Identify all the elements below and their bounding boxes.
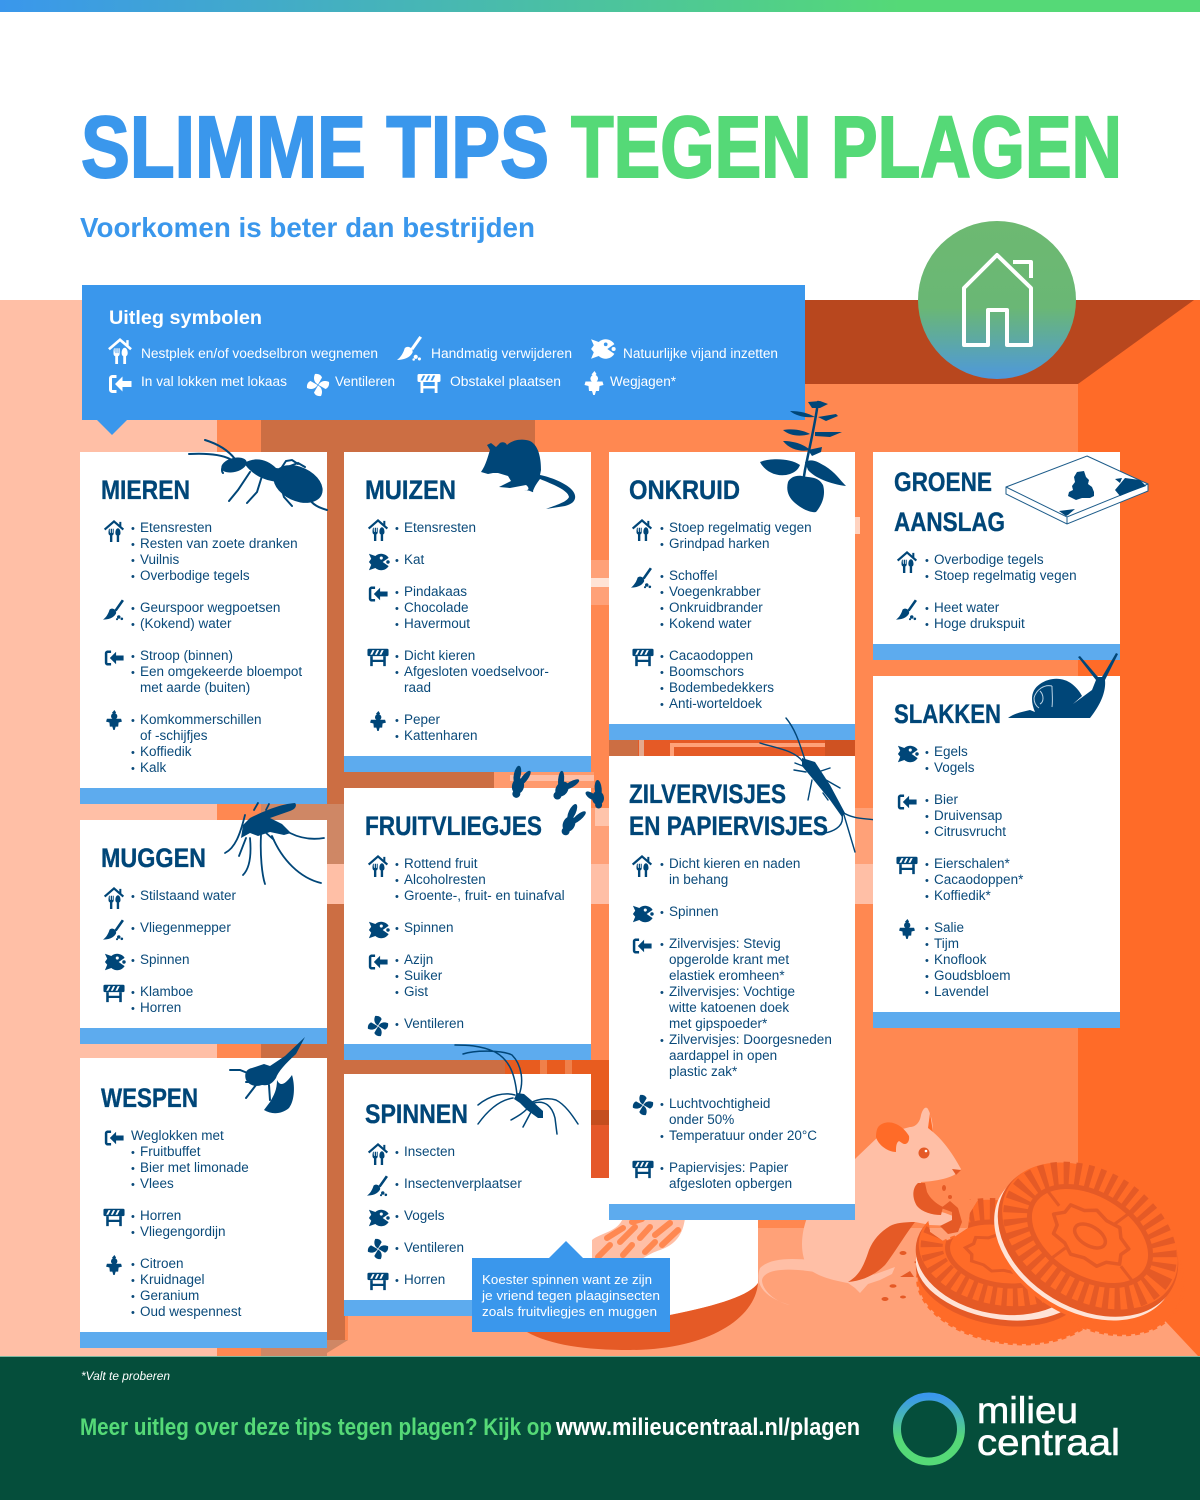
tips: slakken: • — [925, 859, 929, 871]
tips: slakken: • — [925, 987, 929, 999]
tips: onkruid: • — [660, 523, 664, 535]
tips: slakken: • — [925, 891, 929, 903]
tips: muizen: Kattenharen — [404, 728, 478, 743]
tips: wespen: • — [131, 1163, 135, 1175]
illustration: mouse — [758, 1108, 962, 1305]
logo text — [977, 1390, 1120, 1463]
tips: wespen: Vlees — [140, 1176, 174, 1191]
tips: slakken: • — [925, 971, 929, 983]
tips: mieren: • — [131, 763, 135, 775]
tips: onkruid: Kokend water — [669, 616, 752, 631]
legend labels: Wegjagen* — [610, 374, 677, 389]
panel: slakken — [873, 676, 1120, 1028]
tips: muizen: • — [395, 523, 399, 535]
icons: muggen — [103, 887, 126, 1002]
footnote: *Valt te proberen — [81, 1371, 170, 1383]
legend labels: Nestplek en/of voedselbron wegnemen — [141, 346, 378, 361]
tips: mieren: • — [131, 715, 135, 727]
tips: slakken: Goudsbloem — [934, 968, 1011, 983]
panel: groene aanslag — [873, 452, 1120, 660]
tips: spinnen: Ventileren — [404, 1240, 464, 1255]
house badge — [918, 221, 1076, 379]
tips: zilvervisjes: • — [660, 1099, 664, 1111]
tips: slakken: Citrusvrucht — [934, 824, 1006, 839]
bowl with peanuts — [472, 1178, 758, 1350]
tips: wespen: • — [131, 1179, 135, 1191]
heading: muizen: MUIZEN — [365, 475, 456, 505]
tips: zilvervisjes: • — [660, 1035, 664, 1047]
callout: spinnen: Koester spinnen want ze zijn — [482, 1272, 652, 1287]
tips: mieren: Vuilnis — [140, 552, 180, 567]
tips: spinnen: • — [395, 1179, 399, 1191]
tips: slakken: • — [925, 939, 929, 951]
tips: zilvervisjes: Zilvervisjes: Stevig — [669, 936, 781, 951]
tips: spinnen: • — [395, 1211, 399, 1223]
tips: muizen: Pindakaas — [404, 584, 467, 599]
background: room illustration — [0, 300, 1200, 1356]
tips: fruitvliegjes: Azijn — [404, 952, 433, 967]
icons: spinnen — [367, 1143, 390, 1290]
tips: fruitvliegjes: • — [395, 891, 399, 903]
tips: zilvervisjes: Luchtvochtigheid — [669, 1096, 770, 1111]
tips: muizen: • — [395, 667, 399, 679]
tips: zilvervisjes: • — [660, 907, 664, 919]
tips: zilvervisjes: onder 50% — [669, 1112, 734, 1127]
tips: wespen: • — [131, 1147, 135, 1159]
tips: muizen: • — [395, 555, 399, 567]
tips: onkruid: Boomschors — [669, 664, 744, 679]
tips: zilvervisjes: Zilvervisjes: Vochtige — [669, 984, 795, 999]
heading: zilvervisjes — [629, 779, 828, 841]
tips: mieren: Geurspoor wegpoetsen — [140, 600, 280, 615]
illustration: snail — [1008, 653, 1118, 718]
tips: zilvervisjes: Spinnen — [669, 904, 719, 919]
tips: groene aanslag: Hoge drukspuit — [934, 616, 1025, 631]
tips: fruitvliegjes: Groente-, fruit- en tuinafval — [404, 888, 565, 903]
legend labels — [141, 346, 778, 389]
tips: fruitvliegjes: • — [395, 923, 399, 935]
tips: slakken: Druivensap — [934, 808, 1002, 823]
tips: groene aanslag: • — [925, 571, 929, 583]
tips: slakken: • — [925, 875, 929, 887]
tips: spinnen: Horren — [404, 1272, 445, 1287]
illustration: spider — [455, 1045, 578, 1134]
tips: onkruid: Onkruidbrander — [669, 600, 763, 615]
tips: mieren: • — [131, 539, 135, 551]
tips: mieren: • — [131, 603, 135, 615]
tips: spinnen: • — [395, 1243, 399, 1255]
tips: wespen: Horren — [140, 1208, 181, 1223]
logo ring — [897, 1396, 961, 1462]
callout: spinnen: zoals fruitvliegjes en muggen — [482, 1304, 657, 1319]
tips: muizen: Etensresten — [404, 520, 476, 535]
tips: groene aanslag: Heet water — [934, 600, 1000, 615]
tips: zilvervisjes: • — [660, 859, 664, 871]
illustration: silverfish — [760, 718, 875, 852]
tips: wespen: Weglokken met — [131, 1128, 224, 1143]
tips: onkruid: Schoffel — [669, 568, 718, 583]
tips: onkruid: Stoep regelmatig vegen — [669, 520, 812, 535]
heading: groene aanslag — [894, 467, 1005, 537]
tips: mieren: • — [131, 555, 135, 567]
tips: zilvervisjes: aardappel in open — [669, 1048, 777, 1063]
tips: onkruid: • — [660, 539, 664, 551]
tips: groene aanslag: Overbodige tegels — [934, 552, 1044, 567]
tips: wespen: • — [131, 1211, 135, 1223]
tips: slakken: • — [925, 923, 929, 935]
tips: muggen: Stilstaand water — [140, 888, 237, 903]
tips: slakken: • — [925, 955, 929, 967]
tips: muggen: • — [131, 923, 135, 935]
illustration: fruit flies — [509, 765, 605, 840]
tips: spinnen: Vogels — [404, 1208, 445, 1223]
tips: fruitvliegjes: • — [395, 859, 399, 871]
tips: muizen: • — [395, 587, 399, 599]
tips: muizen: Dicht kieren — [404, 648, 475, 663]
illustration: wasp — [230, 1037, 305, 1113]
legend labels: Ventileren — [335, 374, 395, 389]
tips: groene aanslag: • — [925, 619, 929, 631]
tips: zilvervisjes: • — [660, 987, 664, 999]
panel: zilvervisjes — [609, 756, 855, 1220]
tips: mieren: Etensresten — [140, 520, 212, 535]
tips: fruitvliegjes: • — [395, 987, 399, 999]
tips: zilvervisjes: met gipspoeder* — [669, 1016, 768, 1031]
tips: muggen: Vliegenmepper — [140, 920, 231, 935]
tips: zilvervisjes: Dicht kieren en naden — [669, 856, 800, 871]
tips: onkruid: • — [660, 667, 664, 679]
tips: slakken: Bier — [934, 792, 959, 807]
tips: muizen: • — [395, 731, 399, 743]
illustration: ant — [189, 440, 329, 510]
tips: fruitvliegjes: Spinnen — [404, 920, 454, 935]
legend heading: Uitleg symbolen — [109, 308, 262, 329]
icons: onkruid — [631, 519, 654, 666]
legend labels: Handmatig verwijderen — [431, 346, 572, 361]
tips: slakken: Tijm — [934, 936, 959, 951]
subtitle: Voorkomen is beter dan bestrijden — [80, 212, 535, 243]
tips: zilvervisjes: in behang — [669, 872, 728, 887]
tips: muizen: Kat — [404, 552, 425, 567]
logo text: centraal — [977, 1422, 1120, 1463]
legend labels: In val lokken met lokaas — [141, 374, 287, 389]
tips: onkruid: Voegenkrabber — [669, 584, 761, 599]
panel: mieren — [80, 452, 327, 804]
tips: mieren: Komkommerschillen — [140, 712, 262, 727]
tips: muizen: • — [395, 603, 399, 615]
tips: fruitvliegjes: • — [395, 971, 399, 983]
tips: zilvervisjes: plastic zak* — [669, 1064, 738, 1079]
heading: onkruid: ONKRUID — [629, 475, 740, 505]
tips: mieren: Overbodige tegels — [140, 568, 250, 583]
tips: mieren: Kalk — [140, 760, 167, 775]
tips: slakken: • — [925, 811, 929, 823]
tips: mieren: Stroop (binnen) — [140, 648, 233, 663]
illustration: mouse silhouette — [481, 440, 575, 509]
tips: onkruid: • — [660, 603, 664, 615]
tips: fruitvliegjes: Rottend fruit — [404, 856, 478, 871]
tips: zilvervisjes: • — [660, 1131, 664, 1143]
tips: zilvervisjes: afgesloten opbergen — [669, 1176, 792, 1191]
tips: fruitvliegjes: Ventileren — [404, 1016, 464, 1031]
tips: spinnen: • — [395, 1147, 399, 1159]
tips: muggen: • — [131, 987, 135, 999]
tips: fruitvliegjes: • — [395, 875, 399, 887]
tips: slakken: • — [925, 795, 929, 807]
tips: muizen: Chocolade — [404, 600, 469, 615]
panel: wespen — [80, 1058, 327, 1348]
legend panel — [82, 285, 805, 435]
tips: onkruid: • — [660, 651, 664, 663]
heading: muggen: MUGGEN — [101, 843, 206, 873]
tips: mieren: • — [131, 523, 135, 535]
tips: muggen: Klamboe — [140, 984, 193, 999]
tips: muizen: • — [395, 651, 399, 663]
tips: wespen: • — [131, 1275, 135, 1287]
tips: fruitvliegjes: Gist — [404, 984, 428, 999]
tips: groene aanslag: • — [925, 603, 929, 615]
tips: muizen: Havermout — [404, 616, 470, 631]
tips: spinnen: Insecten — [404, 1144, 455, 1159]
tips: groene aanslag: Stoep regelmatig vegen — [934, 568, 1077, 583]
callout: spinnen — [472, 1241, 670, 1332]
panel: fruitvliegjes — [344, 788, 591, 1060]
heading: zilvervisjes: ZILVERVISJES — [629, 779, 786, 809]
legend labels: Obstakel plaatsen — [450, 374, 561, 389]
icons: muizen — [367, 519, 390, 731]
heading: spinnen: SPINNEN — [365, 1099, 468, 1129]
tips: zilvervisjes: elastiek eromheen* — [669, 968, 785, 983]
tips: groene aanslag: • — [925, 555, 929, 567]
heading: wespen: WESPEN — [101, 1083, 198, 1113]
tips: muizen: Peper — [404, 712, 441, 727]
tips: onkruid: • — [660, 683, 664, 695]
illustration: oreo cookies — [916, 1162, 1178, 1346]
tips: mieren: Een omgekeerde bloempot — [140, 664, 302, 679]
tips: wespen: • — [131, 1291, 135, 1303]
logo text: milieu — [977, 1390, 1078, 1431]
panel: muizen — [344, 452, 591, 772]
heading: groene aanslag: AANSLAG — [894, 507, 1005, 537]
tips: mieren: • — [131, 651, 135, 663]
tips: mieren: • — [131, 619, 135, 631]
icons: fruitvliegjes — [368, 855, 390, 1036]
tips: slakken: Lavendel — [934, 984, 989, 999]
tips: wespen: Geranium — [140, 1288, 199, 1303]
tips: slakken: Egels — [934, 744, 968, 759]
tips: zilvervisjes: Zilvervisjes: Doorgesneden — [669, 1032, 832, 1047]
tips: zilvervisjes: opgerolde krant met — [669, 952, 789, 967]
tips: mieren: • — [131, 747, 135, 759]
tips: muizen: raad — [404, 680, 431, 695]
illustration: tile with algae — [1006, 456, 1148, 524]
panel: spinnen — [344, 1074, 591, 1316]
tips: zilvervisjes: Temperatuur onder 20°C — [669, 1128, 817, 1143]
tips: wespen: Vliegengordijn — [140, 1224, 226, 1239]
top gradient bar — [0, 0, 1200, 12]
tips: fruitvliegjes: • — [395, 1019, 399, 1031]
tips: slakken: Koffiedik* — [934, 888, 992, 903]
tips: muggen: • — [131, 891, 135, 903]
tips: slakken: Knoflook — [934, 952, 987, 967]
icons: wespen — [103, 1130, 125, 1275]
tips: onkruid: Grindpad harken — [669, 536, 770, 551]
legend labels: Natuurlijke vijand inzetten — [623, 346, 778, 361]
tips: mieren: met aarde (buiten) — [140, 680, 250, 695]
illustration: nettle — [760, 401, 846, 512]
tips: mieren: Resten van zoete dranken — [140, 536, 298, 551]
callout: spinnen: je vriend tegen plaaginsecten — [481, 1288, 660, 1303]
illustration: mosquito — [225, 803, 324, 884]
tips: onkruid: Anti-worteldoek — [669, 696, 762, 711]
heading: fruitvliegjes: FRUITVLIEGJES — [365, 811, 542, 841]
tips: slakken: • — [925, 827, 929, 839]
tips: wespen: Oud wespennest — [140, 1304, 242, 1319]
tips: mieren: (Kokend) water — [140, 616, 232, 631]
legend icons — [108, 336, 616, 396]
tips: mieren: • — [131, 571, 135, 583]
tips: onkruid: • — [660, 587, 664, 599]
tips: wespen: Citroen — [140, 1256, 184, 1271]
tips: mieren: of -schijfjes — [140, 728, 208, 743]
tips: muggen: Spinnen — [140, 952, 190, 967]
tips: fruitvliegjes: Alcoholresten — [404, 872, 486, 887]
call to action: www.milieucentraal.nl/plagen — [555, 1414, 860, 1441]
panel: onkruid — [609, 452, 855, 740]
tips: mieren: Koffiedik — [140, 744, 192, 759]
tips: onkruid: Cacaodoppen — [669, 648, 753, 663]
tips: onkruid: Bodembedekkers — [669, 680, 774, 695]
tips: zilvervisjes: • — [660, 939, 664, 951]
tips: onkruid: • — [660, 571, 664, 583]
tips: fruitvliegjes: Suiker — [404, 968, 443, 983]
heading: zilvervisjes: EN PAPIERVISJES — [629, 811, 828, 841]
tips: muizen: • — [395, 619, 399, 631]
tips: wespen: • — [131, 1227, 135, 1239]
icons: mieren — [103, 520, 124, 730]
tips: muizen: • — [395, 715, 399, 727]
tips: wespen: Bier met limonade — [140, 1160, 249, 1175]
call to action: Meer uitleg over deze tips tegen plagen? Kijk op — [80, 1414, 552, 1441]
title — [81, 99, 1122, 196]
tips: muizen: Afgesloten voedselvoor- — [404, 664, 549, 679]
heading: slakken: SLAKKEN — [894, 699, 1001, 729]
icons: groene aanslag — [896, 551, 917, 620]
tips: zilvervisjes: • — [660, 1163, 664, 1175]
tips: slakken: Salie — [934, 920, 964, 935]
tips: slakken: • — [925, 747, 929, 759]
tips: zilvervisjes: Papiervisjes: Papier — [669, 1160, 789, 1175]
tips: wespen: Fruitbuffet — [140, 1144, 201, 1159]
icons: slakken — [896, 746, 919, 939]
tips: spinnen: Insectenverplaatser — [404, 1176, 522, 1191]
tips: mieren: • — [131, 667, 135, 679]
heading: mieren: MIEREN — [101, 475, 190, 505]
tips: muggen: • — [131, 1003, 135, 1015]
tips: wespen: • — [131, 1259, 135, 1271]
footer band — [0, 1356, 1200, 1500]
tips: muggen: • — [131, 955, 135, 967]
tips: slakken: • — [925, 763, 929, 775]
title: SLIMME TIPS — [81, 99, 549, 196]
tips: slakken: Eierschalen* — [934, 856, 1011, 871]
tips: onkruid: • — [660, 699, 664, 711]
tips: slakken: Vogels — [934, 760, 975, 775]
heading: groene aanslag: GROENE — [894, 467, 992, 497]
tips: wespen: • — [131, 1307, 135, 1319]
icons: zilvervisjes — [632, 855, 654, 1178]
tips: slakken: Cacaodoppen* — [934, 872, 1024, 887]
tips: spinnen: • — [395, 1275, 399, 1287]
tips: onkruid: • — [660, 619, 664, 631]
tips: zilvervisjes: witte katoenen doek — [668, 1000, 789, 1015]
tips: fruitvliegjes: • — [395, 955, 399, 967]
tips: wespen: Kruidnagel — [140, 1272, 205, 1287]
tips: muggen: Horren — [140, 1000, 181, 1015]
panel: muggen — [80, 820, 327, 1044]
